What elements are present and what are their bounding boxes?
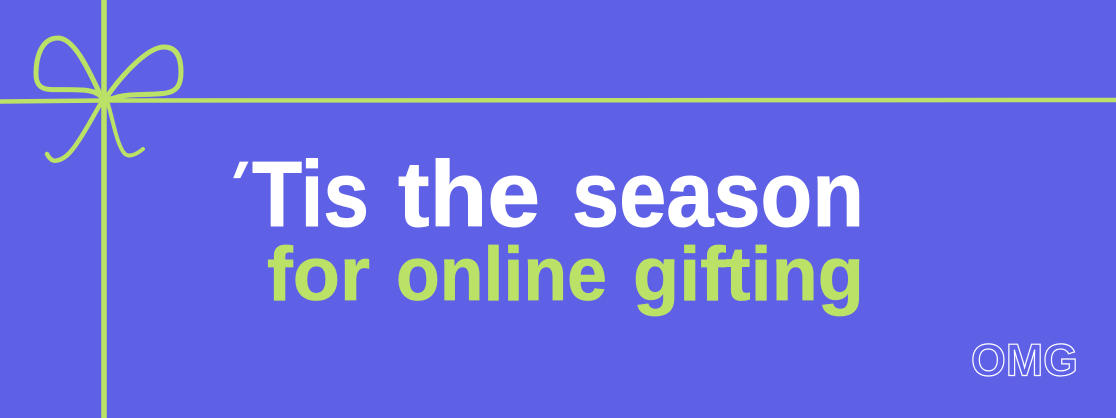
heading line 1: the [398, 142, 540, 246]
heading line 1: ' [210, 147, 258, 221]
heading line 1: Tis [252, 142, 369, 246]
heading line 1 [210, 142, 864, 246]
heading line 2: online [396, 232, 607, 317]
heading line 2: gifting [633, 232, 864, 317]
heading line 1: season [572, 142, 864, 246]
heading line 2: for [267, 232, 370, 317]
heading line 2 [267, 232, 864, 317]
logo: OMG: OMG [971, 334, 1078, 386]
